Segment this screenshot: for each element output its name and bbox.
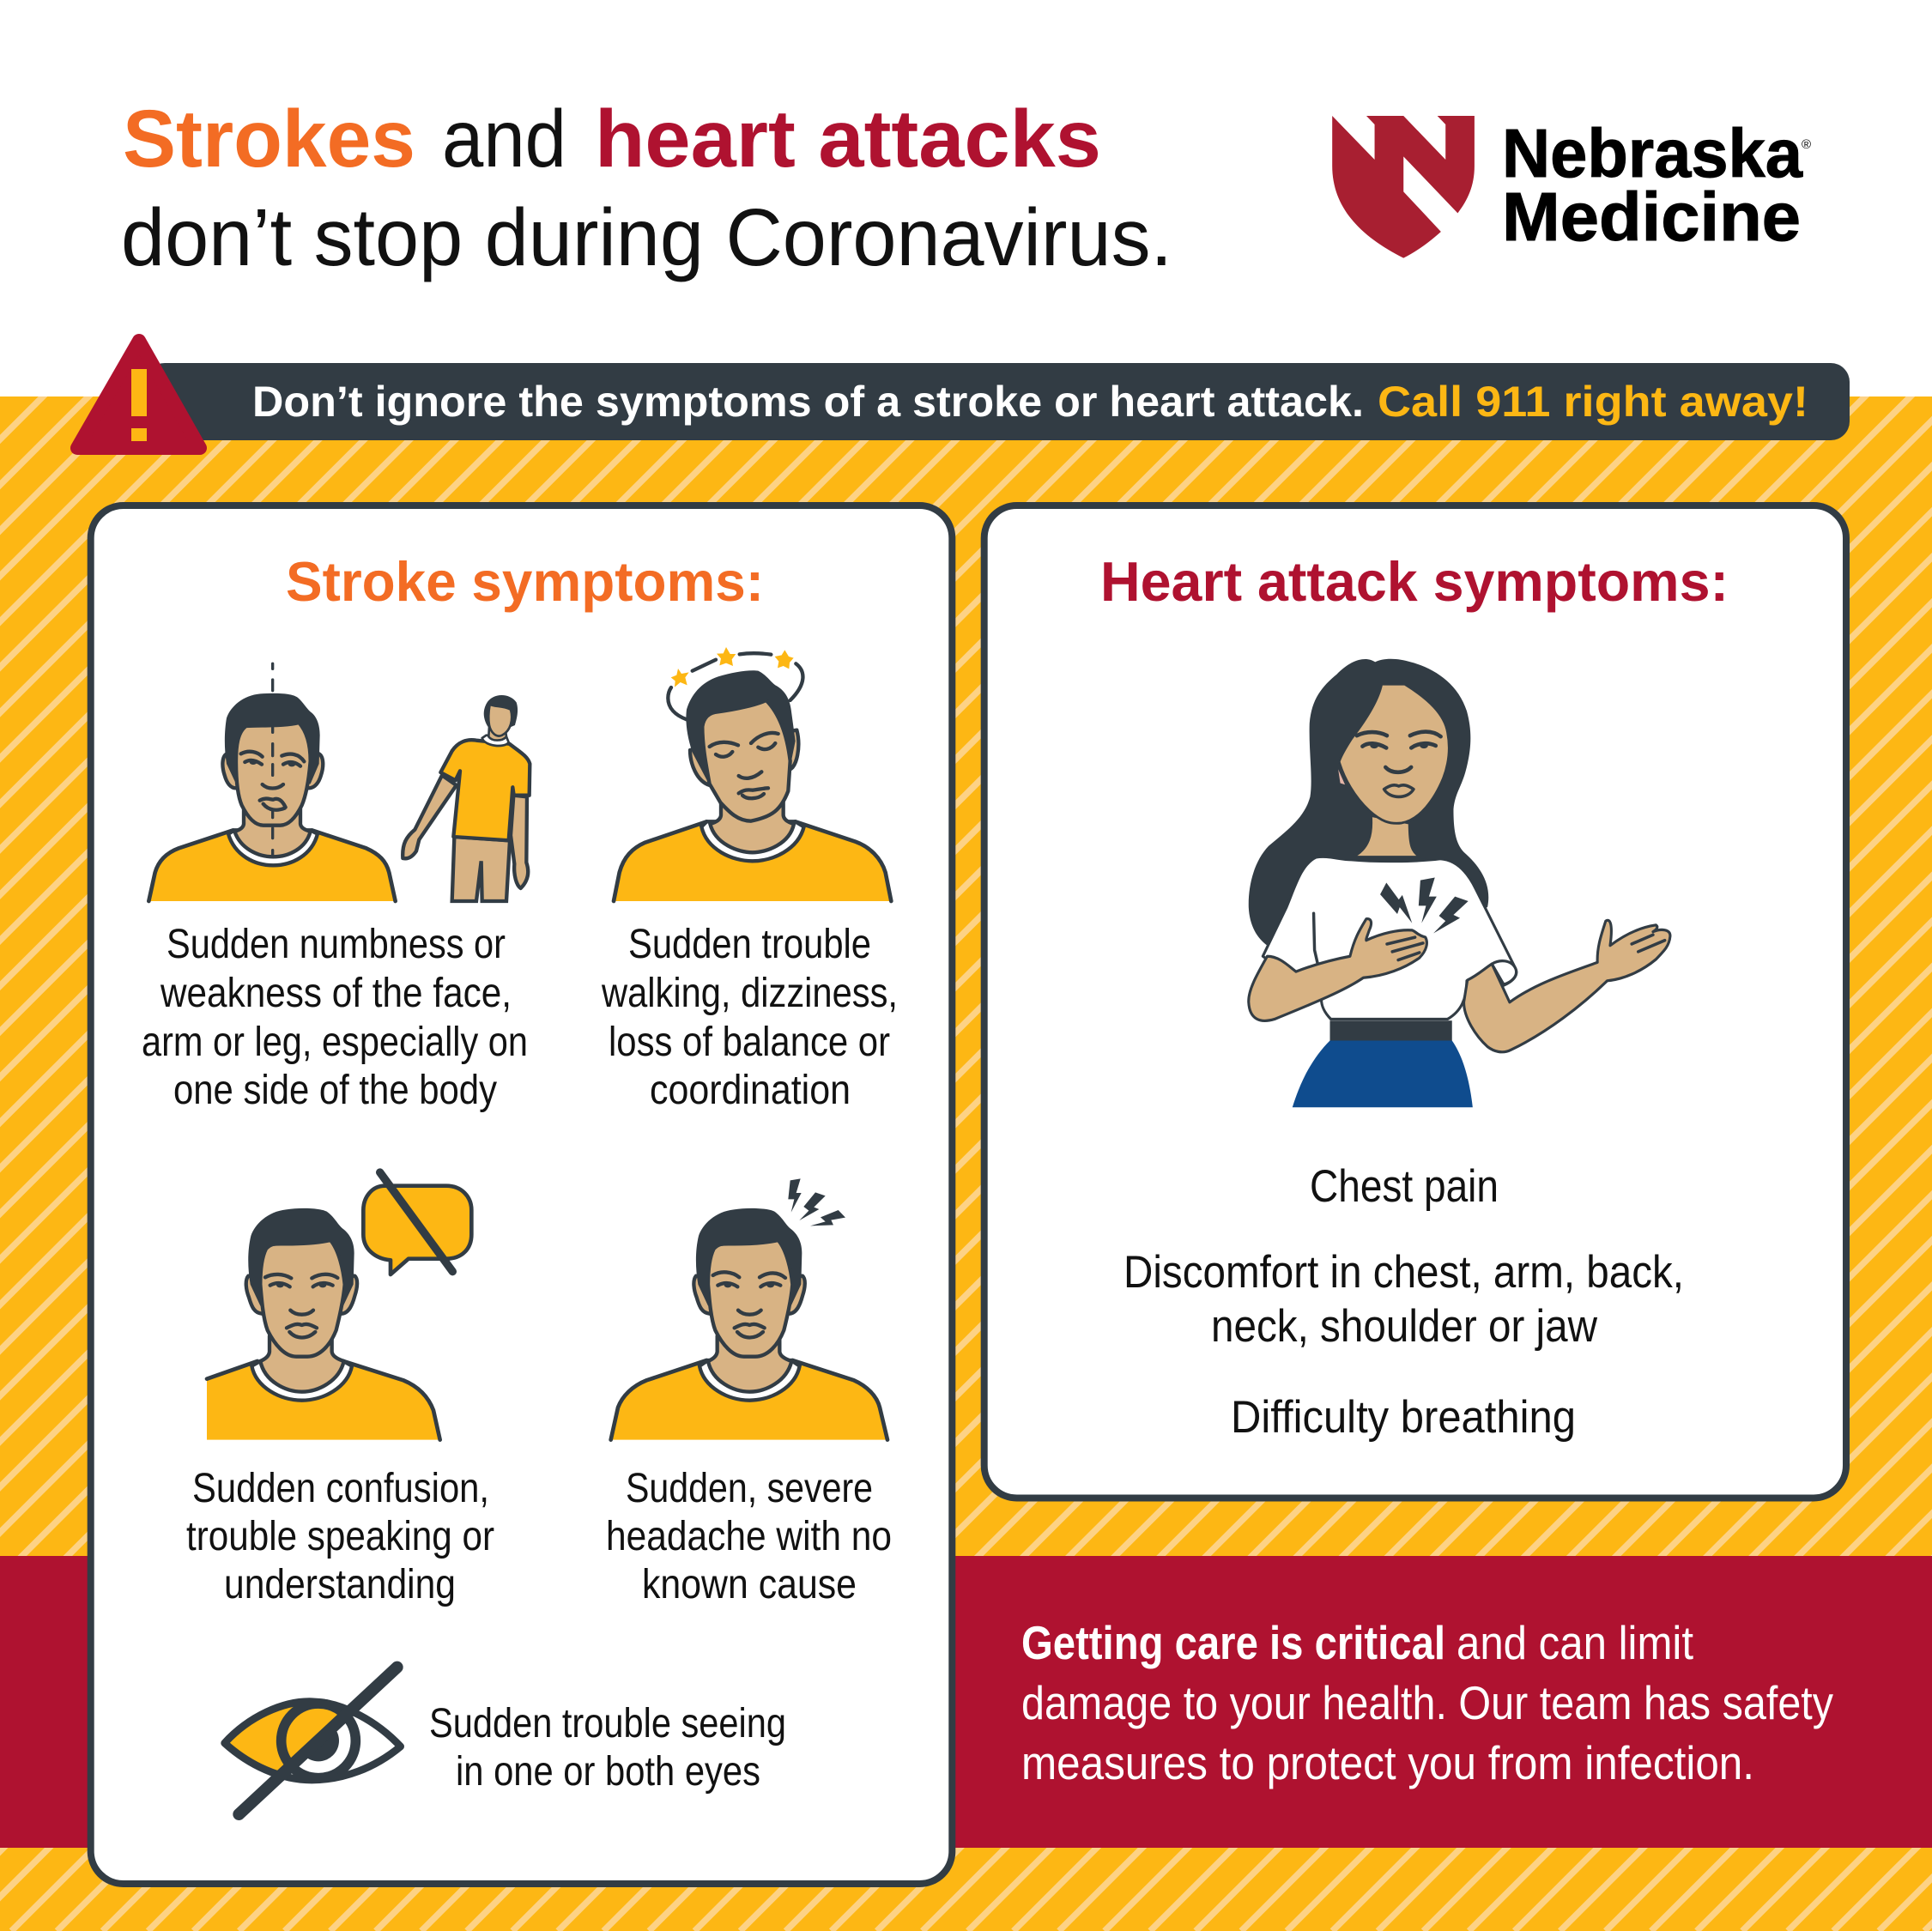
symptom text: confusion: trouble speaking or (186, 1514, 494, 1559)
icon: woman with chest pain (1249, 659, 1670, 1107)
symptom text: face, arm or leg: arm or leg, especially on (142, 1020, 528, 1065)
title: Strokes (123, 94, 415, 185)
logo wordmark: Medicine (1502, 179, 1801, 255)
icon: head with crossed-out speech bubble (207, 1172, 471, 1440)
symptom text: walking and balance (601, 922, 898, 1113)
title: and (442, 94, 566, 185)
title: heart attacks (595, 94, 1101, 185)
symptom text: confusion: understanding (224, 1562, 456, 1607)
symptom text: headache: headache with no (606, 1514, 892, 1559)
symptom list: heart attack: neck, shoulder or jaw (1211, 1301, 1598, 1352)
symptom list: heart attack: Chest pain (1310, 1161, 1499, 1212)
panel: heart attack symptoms (984, 505, 1846, 1498)
icon: dizzy head with stars (614, 647, 891, 901)
icon: drooping face and limp arm (148, 663, 530, 901)
symptom text: headache: known cause (642, 1562, 857, 1607)
title (121, 94, 1172, 283)
icon: warning triangle (77, 341, 200, 448)
symptom text: headache (606, 1466, 892, 1607)
symptom text: confusion: Sudden confusion, (192, 1466, 489, 1511)
symptom text: walking and balance: loss of balance or (609, 1020, 890, 1065)
logo: Nebraska Medicine (1332, 115, 1811, 258)
small standing figure (403, 775, 457, 858)
symptom text: confusion (186, 1466, 494, 1607)
symptom text: walking and balance: walking, dizziness, (601, 971, 898, 1016)
callout: getting care is critical (1021, 1616, 1833, 1789)
title: don’t stop during Coronavirus. (121, 192, 1172, 283)
logo wordmark: Nebraska (1502, 115, 1802, 191)
symptom text: walking and balance: coordination (650, 1068, 851, 1113)
heading: stroke symptoms: Stroke symptoms: (286, 550, 764, 613)
symptom text: vision: in one or both eyes (456, 1749, 760, 1795)
banner text: Call 911 right away! (1378, 378, 1808, 426)
striped yellow background (0, 386, 1932, 1931)
callout: getting care is critical: damage to your health. Our team has safety (1021, 1676, 1833, 1729)
logo wordmark: ® (1802, 137, 1811, 152)
symptom text: vision: Sudden trouble seeing (429, 1701, 786, 1746)
icon: head with lightning headache (611, 1178, 887, 1440)
icon: shield (1332, 116, 1475, 258)
callout: getting care is critical: measures to protect you from infection. (1021, 1736, 1754, 1789)
symptom list: heart attack (1123, 1161, 1684, 1443)
logo wordmark (1502, 115, 1811, 255)
panel: stroke symptoms (91, 505, 952, 1884)
callout: getting care is critical: and can limit (1457, 1616, 1693, 1669)
symptom text: walking and balance: Sudden trouble (628, 922, 871, 967)
icon: crossed-out eye (225, 1668, 401, 1814)
symptom text: face, arm or leg: one side of the body (173, 1068, 497, 1113)
callout: getting care is critical: Getting care is critical (1021, 1616, 1445, 1669)
symptom text: face, arm or leg: Sudden numbness or (167, 922, 506, 967)
banner (77, 341, 1850, 448)
heading: heart attack symptoms: Heart attack symptoms: (1100, 550, 1729, 613)
symptom text: face, arm or leg (142, 922, 528, 1113)
symptom text: headache: Sudden, severe (626, 1466, 873, 1511)
red band (0, 1556, 1932, 1848)
symptom text: vision (429, 1701, 786, 1795)
symptom text: face, arm or leg: weakness of the face, (160, 971, 512, 1016)
symptom list: heart attack: Difficulty breathing (1231, 1392, 1576, 1443)
banner text: Don’t ignore the symptoms of a stroke or heart attack. (252, 378, 1364, 426)
symptom list: heart attack: Discomfort in chest, arm, back, (1123, 1247, 1684, 1298)
